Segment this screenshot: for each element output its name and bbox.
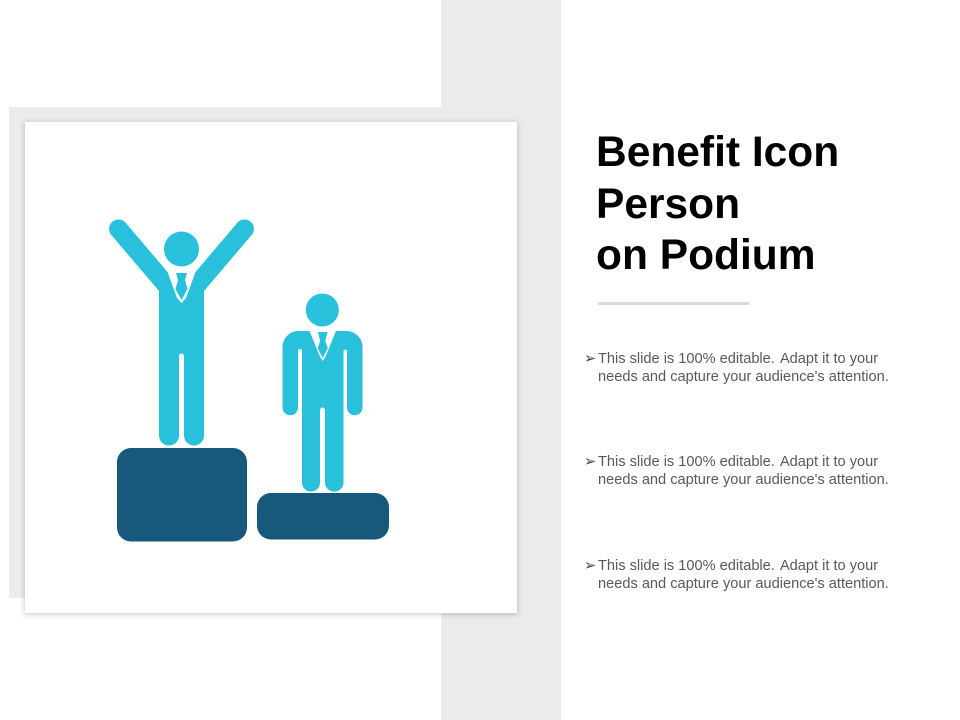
divider under title xyxy=(598,302,749,305)
text block: bullet 2 xyxy=(584,454,889,488)
podium: tall xyxy=(117,448,247,542)
text block: bullet 1: ➢ xyxy=(584,351,596,367)
title: Benefit Icon xyxy=(596,129,839,176)
text block: bullet 3 xyxy=(584,558,889,592)
text block: bullet 2: This slide is 100% editable. Adapt it to your xyxy=(598,454,878,470)
text block: bullet 1: This slide is 100% editable. Adapt it to your xyxy=(598,351,878,367)
grey backing panel xyxy=(9,107,441,598)
text block: bullet 2: needs and capture your audience's attention. xyxy=(598,472,889,488)
title: Person xyxy=(596,181,740,228)
text block: bullet 1: needs and capture your audience's attention. xyxy=(598,369,889,385)
title xyxy=(596,129,839,279)
text block: bullet 3: ➢ xyxy=(584,558,596,574)
icon: winner with raised arms xyxy=(109,220,254,446)
vertical grey band xyxy=(441,0,561,720)
title: on Podium xyxy=(596,232,816,279)
panel: white icon card xyxy=(25,122,517,613)
icon: standing person xyxy=(282,294,363,492)
text block: bullet 1 xyxy=(584,351,889,385)
text block: bullet 2: ➢ xyxy=(584,454,596,470)
text block: bullet 3: This slide is 100% editable. Adapt it to your xyxy=(598,558,878,574)
podium: short xyxy=(257,493,389,540)
text block: bullet 3: needs and capture your audience's attention. xyxy=(598,576,889,592)
